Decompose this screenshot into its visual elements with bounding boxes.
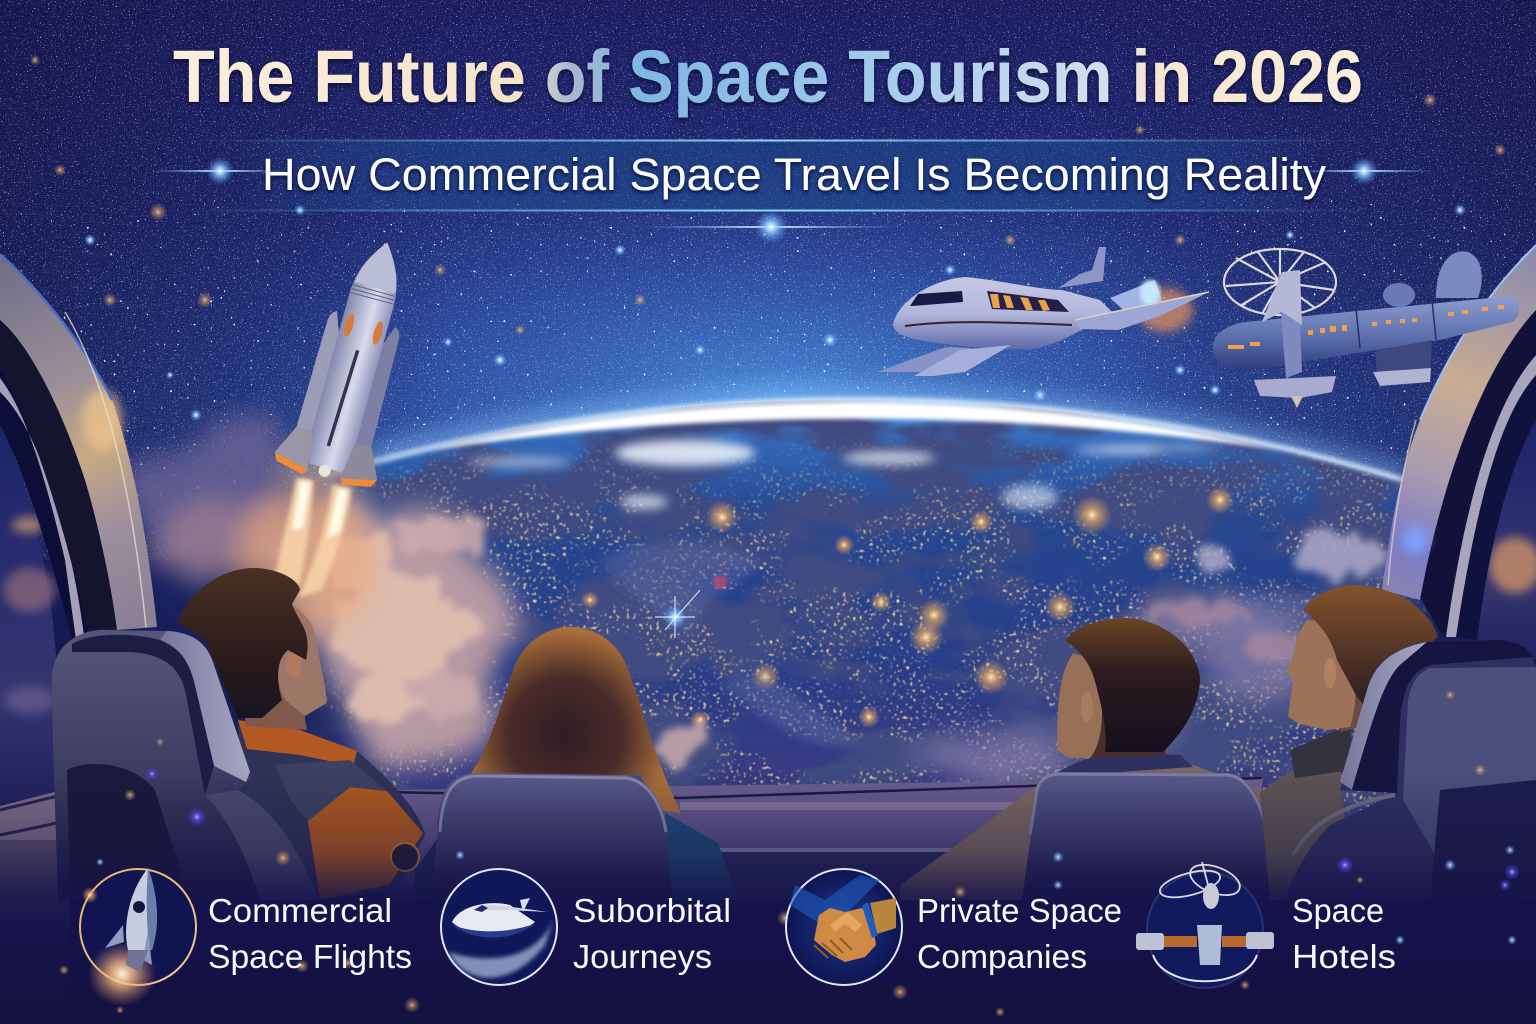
label: Companies [917,939,1087,976]
seat: right [1285,640,1536,900]
label: Space Flights [208,939,412,976]
label: Commercial [208,893,392,930]
passenger: man in orange jacket [178,568,425,900]
label: Space [1292,893,1384,930]
title: The Future of Space Tourism in 2026 [173,35,1363,118]
icon: handshake [786,869,902,985]
clouds [130,423,1387,786]
feature: suborbital journeys [441,869,731,985]
sparkle star [655,575,727,638]
passenger: man with short brown hair [900,618,1262,900]
window sill [385,778,1262,900]
icon: rocket [80,868,196,1006]
label: Hotels [1292,939,1396,976]
river patches [600,541,1330,745]
seat: centre left [432,773,672,900]
passenger: woman with long hair [415,627,738,900]
feature: private space companies [786,869,1122,985]
space station hotel [1213,249,1519,408]
rocket launching [235,228,438,635]
bottom dark fade [0,770,1536,1024]
subtitle banner: How Commercial Space Travel Is Becoming Reality [262,149,1327,200]
window frame: left [0,254,157,1024]
subtitle banner [150,140,1435,244]
jacket [238,720,425,900]
bokeh lights [59,690,1520,1017]
hair [178,568,308,718]
window frame: right [1382,245,1536,660]
seat: centre right [1022,772,1272,900]
label: Suborbital [573,893,731,930]
suborbital spaceplane [877,247,1209,376]
passenger: man at right window [1260,585,1438,900]
icon: space station [1136,859,1274,988]
feature: space hotels [1136,859,1396,988]
earth globe [250,400,1450,820]
exhaust plume [275,478,352,598]
seat: left [52,630,318,900]
feature: commercial space flights [80,868,412,1006]
neck and face [245,680,307,730]
label: Journeys [573,939,712,976]
label: Private Space [917,893,1122,930]
icon: spaceplane [441,869,557,985]
